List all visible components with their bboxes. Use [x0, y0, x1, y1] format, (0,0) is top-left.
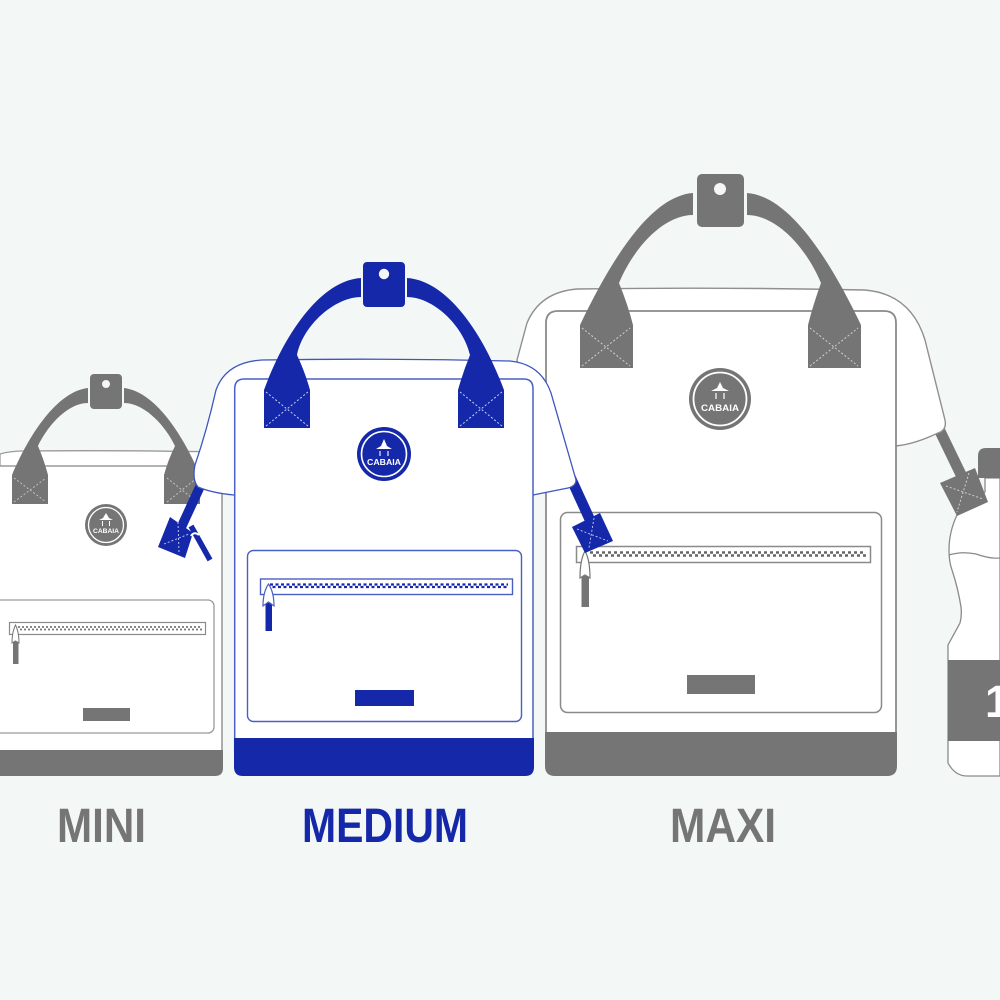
mini right handle	[124, 388, 200, 504]
label: MEDIUM: MEDIUM	[302, 800, 468, 853]
maxi flap	[517, 288, 945, 446]
medium logo badge	[357, 427, 411, 481]
maxi logo badge	[689, 368, 751, 430]
backpack: medium	[158, 262, 613, 776]
mini logo badge	[85, 504, 127, 546]
mini zipper	[10, 622, 206, 664]
mini base	[0, 750, 223, 776]
medium base	[234, 738, 534, 776]
maxi side strap	[937, 425, 988, 516]
bottle body	[948, 478, 1000, 776]
backpack: maxi	[517, 174, 988, 776]
maxi body panel	[546, 311, 896, 750]
medium label patch	[355, 690, 414, 706]
medium stitching	[266, 392, 502, 426]
maxi label patch	[687, 675, 755, 694]
bottle cap	[978, 448, 1000, 478]
label: MAXI: MAXI	[670, 800, 776, 853]
medium left strap and puller	[158, 478, 210, 560]
maxi logo badge: CABAIA	[701, 403, 740, 413]
medium zipper	[260, 579, 512, 631]
medium body panel	[235, 379, 533, 750]
medium left handle	[264, 278, 361, 428]
label: MINI: MINI	[57, 800, 146, 853]
mini hanging tag	[90, 374, 122, 409]
maxi right handle	[747, 193, 861, 368]
mini flap	[0, 451, 222, 500]
bottle band	[948, 660, 1000, 741]
maxi pocket	[560, 512, 882, 712]
medium right strap	[568, 472, 613, 553]
maxi left handle	[580, 193, 693, 368]
water bottle	[948, 448, 1000, 776]
mini stitching	[14, 478, 197, 502]
backpack: mini	[0, 374, 223, 776]
mini body panel	[0, 466, 222, 760]
mini logo badge: CABAIA	[93, 528, 119, 535]
maxi stitching	[582, 328, 858, 366]
mini pocket	[0, 600, 214, 733]
medium flap	[194, 359, 576, 495]
maxi base	[545, 732, 897, 776]
mini left handle	[12, 388, 88, 504]
mini label patch	[83, 708, 130, 721]
medium right handle	[407, 278, 504, 428]
medium logo badge: CABAIA	[367, 458, 401, 467]
maxi zipper	[576, 546, 870, 607]
maxi hanging tag	[697, 174, 744, 227]
medium pocket	[248, 550, 522, 722]
medium hanging tag	[363, 262, 405, 307]
